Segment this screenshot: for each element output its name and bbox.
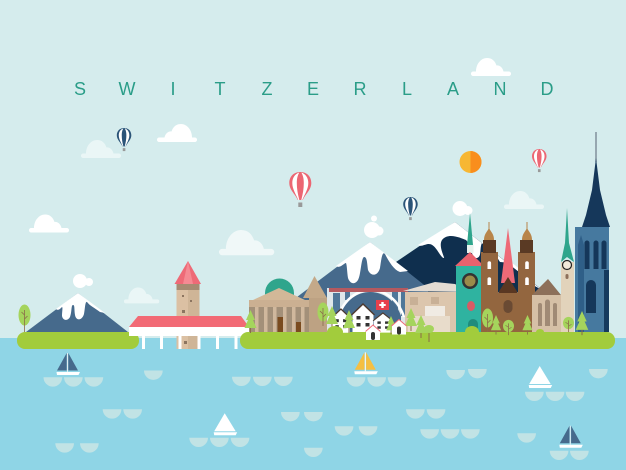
sailboat: navy, right bbox=[559, 426, 583, 448]
clouds bbox=[29, 58, 544, 303]
balloons bbox=[117, 128, 547, 220]
blue cathedral bbox=[575, 132, 610, 332]
left island bbox=[17, 332, 139, 349]
sailboat: navy, left bbox=[56, 353, 80, 375]
trees bbox=[244, 302, 588, 338]
sun bbox=[460, 151, 482, 173]
domed building bbox=[249, 278, 309, 332]
sailboat: white, right bbox=[529, 366, 552, 388]
sailboat: yellow bbox=[354, 352, 378, 374]
Grossmunster cathedral bbox=[481, 222, 535, 332]
main island bbox=[240, 332, 615, 349]
stone building bbox=[403, 282, 468, 332]
central mountain bbox=[297, 216, 428, 332]
sailboat: white, centre bbox=[214, 413, 237, 435]
bushes bbox=[327, 326, 544, 338]
title: SWITZERLAND bbox=[74, 79, 554, 99]
left mountain bbox=[26, 274, 128, 332]
brown sapling bbox=[424, 325, 434, 342]
Fraumunster tower bbox=[561, 208, 574, 332]
icon: tree on left island bbox=[18, 304, 30, 332]
waves bbox=[44, 369, 608, 460]
chapel bridge and water tower bbox=[129, 261, 249, 349]
sky background bbox=[0, 0, 626, 338]
small red-roof houses bbox=[366, 320, 406, 340]
water bbox=[0, 338, 626, 470]
clock tower bbox=[455, 213, 486, 332]
Swiss flag bbox=[376, 300, 389, 310]
dark mountain bbox=[396, 201, 545, 292]
arched railway viaduct bbox=[327, 288, 408, 332]
church behind dome bbox=[303, 276, 327, 332]
chalets bbox=[331, 304, 393, 333]
beige church bbox=[532, 279, 561, 332]
